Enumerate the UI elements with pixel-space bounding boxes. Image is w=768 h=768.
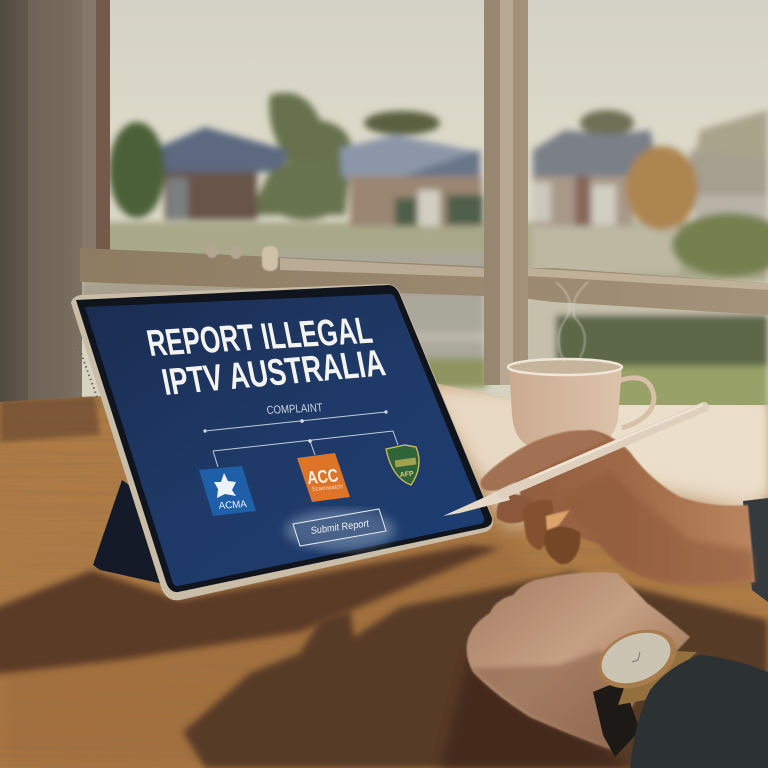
mullion <box>484 0 528 385</box>
icon: white stylus <box>443 405 704 516</box>
watch case <box>589 619 685 699</box>
index finger <box>481 430 606 491</box>
title: REPORT ILLEGAL IPTV AUSTRALIA: IPTV AUSTRALIA <box>158 341 389 403</box>
button: Submit Report: Submit Report <box>311 518 369 537</box>
shadow: arm shadow on table <box>183 572 768 768</box>
lawn and road <box>100 222 768 282</box>
text: complaint label: COMPLAINT <box>266 402 323 417</box>
title: REPORT ILLEGAL IPTV AUSTRALIA: REPORT ILLEGAL <box>143 309 376 364</box>
cup body <box>509 366 622 447</box>
icon: right arm sleeve <box>743 498 768 602</box>
logo: AFP shield <box>386 445 419 485</box>
logo: ACMA <box>199 466 256 516</box>
icon: tablet kickstand <box>93 480 168 585</box>
screen <box>85 294 484 586</box>
icon: left hand resting on table <box>467 572 690 750</box>
shaded underside <box>560 470 755 585</box>
logo: ACC Scamwatch <box>297 453 350 502</box>
logo: AFP shield: AFP <box>400 471 414 479</box>
lower view: road, hedge and grass <box>80 280 768 416</box>
logo: ACMA: ACMA <box>218 499 248 512</box>
houses <box>157 127 768 230</box>
panel: interior wall and window frame <box>0 0 768 410</box>
lower fingers <box>497 494 532 523</box>
logo: ACC Scamwatch: ACC <box>306 465 340 488</box>
wood grain <box>8 403 762 610</box>
icon: wrist watch <box>589 619 697 757</box>
glare on table <box>415 380 768 525</box>
window latch <box>206 244 278 271</box>
panel: wooden table <box>0 380 768 768</box>
icon: steaming coffee mug <box>508 282 654 447</box>
icon: left arm dark sleeve <box>630 655 768 768</box>
speaker dots <box>78 345 100 405</box>
panel: tablet <box>71 284 493 600</box>
foreground trees and bushes <box>109 122 768 277</box>
handle <box>618 378 654 428</box>
shadow: tablet shadow across table <box>0 545 500 675</box>
title: REPORT ILLEGAL IPTV AUSTRALIA <box>143 309 389 403</box>
tablet body <box>71 284 493 600</box>
panel: outdoor suburban view through window <box>80 0 768 420</box>
watch face <box>594 623 678 693</box>
steam <box>556 282 588 362</box>
flow chart connector lines <box>204 411 398 467</box>
strap <box>593 680 640 757</box>
trees behind houses <box>255 93 768 215</box>
logo: ACC Scamwatch: Scamwatch <box>311 484 343 493</box>
button: Submit Report <box>285 509 395 550</box>
icon: right hand holding stylus <box>481 430 755 585</box>
back of hand and wrist <box>510 430 755 585</box>
